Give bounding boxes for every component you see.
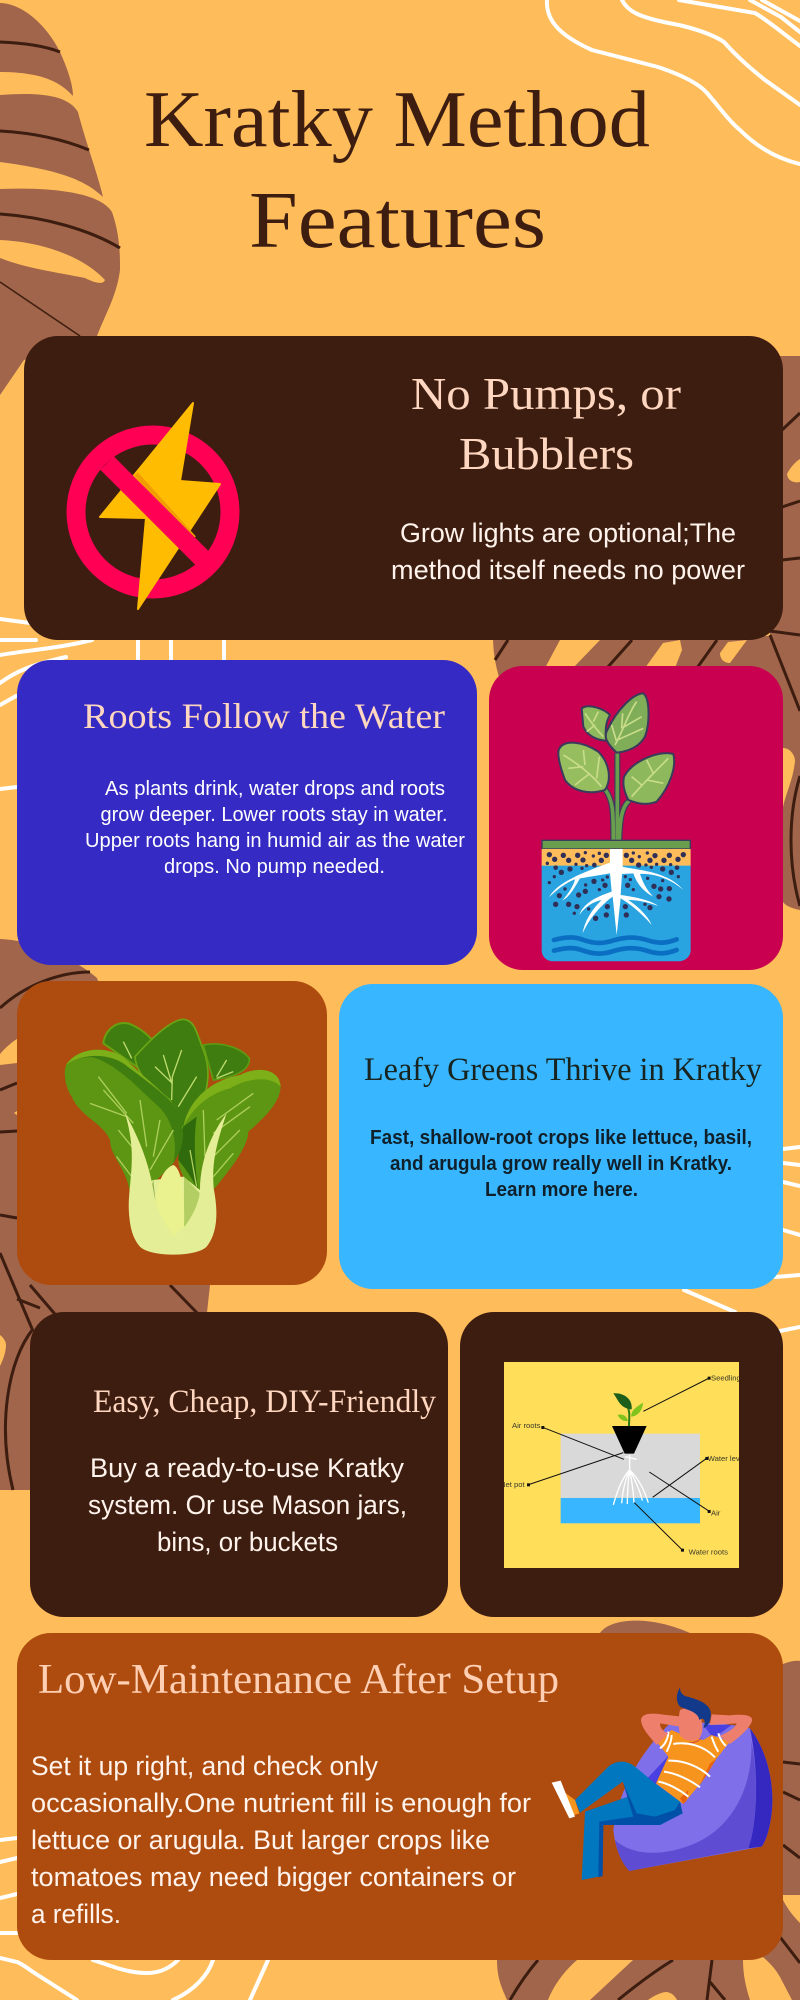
icon: no power bbox=[76, 403, 230, 609]
heading: easy cheap: Easy, Cheap, DIY-Friendly bbox=[93, 1384, 436, 1420]
panel: kratky diagram bbox=[460, 1312, 783, 1617]
text: leafy description: Learn more here. bbox=[485, 1179, 638, 1201]
panel: plant illustration bbox=[489, 666, 783, 970]
title bbox=[144, 76, 650, 265]
heading: no pumps: No Pumps, or bbox=[411, 368, 681, 419]
heading: low maintenance: Low-Maintenance After Setup bbox=[38, 1657, 559, 1703]
background leaf: left middle bbox=[0, 939, 210, 1490]
chart: labelled kratky diagram: Air bbox=[711, 1508, 721, 1517]
chart: labelled kratky diagram: Net pot bbox=[500, 1480, 526, 1489]
text: easy description: system. Or use Mason jars, bbox=[88, 1490, 407, 1520]
chart: labelled kratky diagram bbox=[500, 1362, 746, 1568]
text: low maintenance description: tomatoes may need bigger containers or bbox=[31, 1862, 516, 1892]
text: easy description: Buy a ready-to-use Kratky bbox=[90, 1453, 404, 1483]
heading: leafy greens: Leafy Greens Thrive in Kratky bbox=[364, 1052, 762, 1088]
panel: easy cheap DIY bbox=[30, 1312, 448, 1617]
text: grow lights: Grow lights are optional;The bbox=[400, 518, 736, 548]
panel: no pumps or bubblers bbox=[24, 336, 783, 640]
background leaf: top left bbox=[0, 3, 120, 395]
text: easy description bbox=[88, 1453, 407, 1557]
text: easy description: bins, or buckets bbox=[157, 1527, 338, 1557]
heading: roots: Roots Follow the Water bbox=[83, 696, 445, 736]
background leaf: right lower bbox=[497, 1621, 800, 2000]
icon: bok choy bbox=[65, 1019, 281, 1255]
text: roots description: drops. No pump needed. bbox=[164, 856, 385, 878]
chart: labelled kratky diagram: Water level bbox=[708, 1454, 746, 1463]
heading: no pumps bbox=[411, 368, 681, 479]
text: roots description bbox=[85, 778, 465, 878]
text: leafy description: Fast, shallow-root crops like lettuce, basil, bbox=[370, 1127, 752, 1149]
text: low maintenance description: Set it up right, and check only bbox=[31, 1751, 378, 1781]
panel: roots follow the water bbox=[17, 660, 477, 965]
icon: plant with roots bbox=[542, 693, 691, 961]
title: Features bbox=[249, 177, 546, 265]
text: low maintenance description: a refills. bbox=[31, 1899, 121, 1929]
panel: low maintenance bbox=[17, 1633, 783, 1960]
text: grow lights bbox=[391, 518, 745, 585]
text: low maintenance description: occasionally.One nutrient fill is enough for bbox=[31, 1788, 531, 1818]
text: low maintenance description: lettuce or arugula. But larger crops like bbox=[31, 1825, 490, 1855]
panel: leafy greens bbox=[339, 984, 783, 1289]
icon: man relaxing on beanbag bbox=[552, 1687, 772, 1880]
panel: bok choy illustration bbox=[17, 981, 327, 1285]
background leaf: right upper bbox=[493, 356, 800, 910]
text: grow lights: method itself needs no power bbox=[391, 555, 745, 585]
chart: labelled kratky diagram: Seedling bbox=[711, 1373, 741, 1382]
text: roots description: grow deeper. Lower roots stay in water. bbox=[100, 804, 448, 826]
text: leafy description: and arugula grow really well in Kratky. bbox=[390, 1153, 732, 1175]
text: leafy description bbox=[370, 1127, 752, 1201]
heading: no pumps: Bubblers bbox=[459, 428, 634, 479]
text: roots description: As plants drink, water drops and roots bbox=[105, 778, 445, 800]
title: Kratky Method bbox=[144, 76, 650, 164]
text: low maintenance description bbox=[31, 1751, 531, 1929]
chart: labelled kratky diagram: Water roots bbox=[689, 1547, 728, 1556]
text: roots description: Upper roots hang in humid air as the water bbox=[85, 830, 465, 852]
chart: labelled kratky diagram: Air roots bbox=[512, 1421, 541, 1430]
